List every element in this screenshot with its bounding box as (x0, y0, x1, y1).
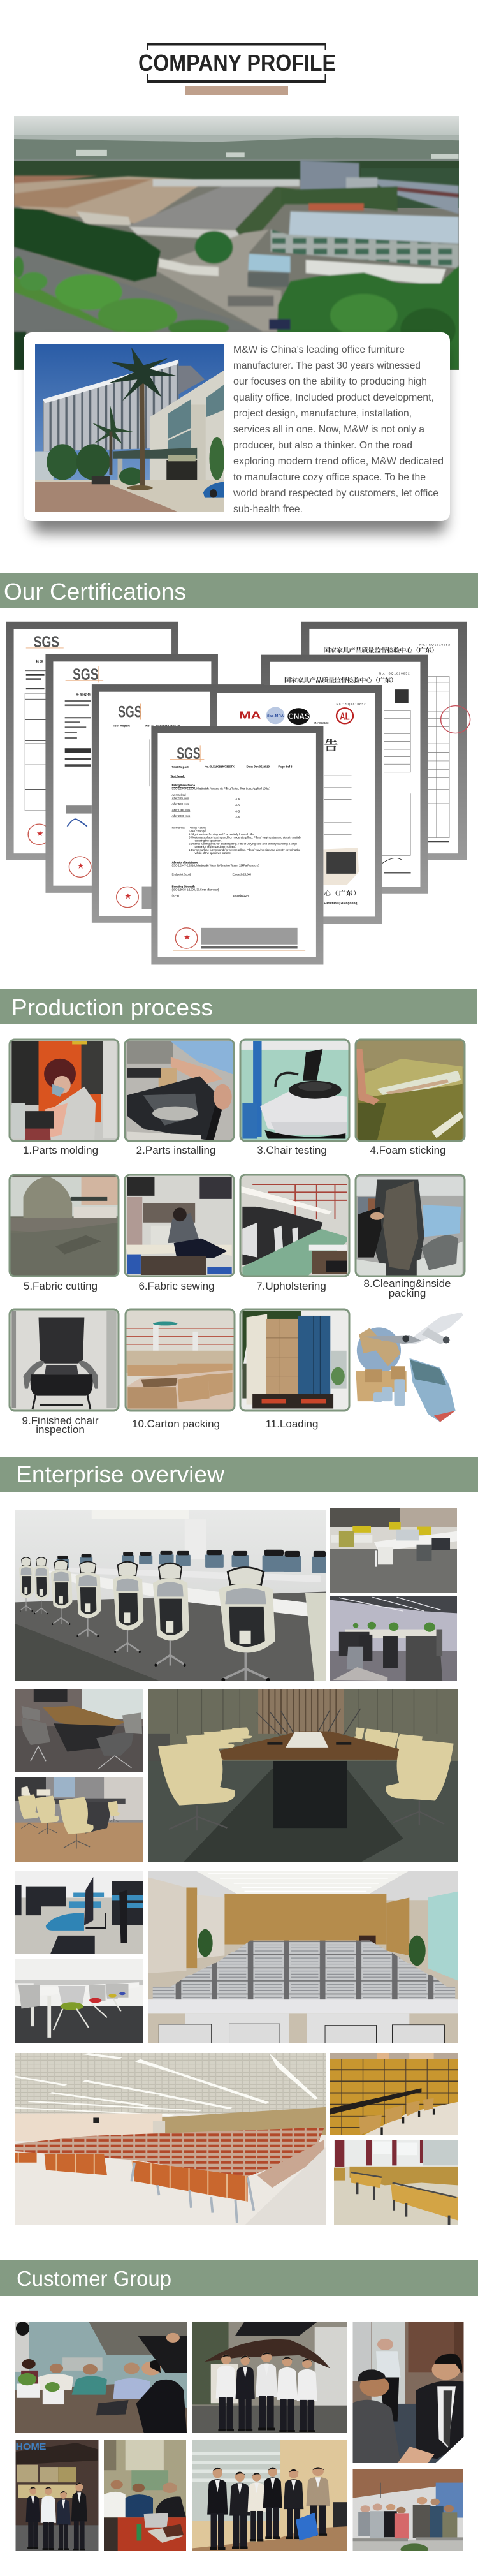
card background (24, 332, 450, 521)
certificate: SGS front centre: 5 No change (189, 830, 206, 833)
photo: tiered seating with yellow wooden desks (330, 2053, 458, 2135)
certificate: national test report third right: No.: SQ1810852 (337, 703, 366, 706)
certificate: SGS third left: SGS (118, 702, 142, 721)
step 4: foam sticking (356, 1040, 465, 1156)
certificate: national test report second right (261, 655, 428, 894)
certificate: SGS front centre: Abrasion Resistance (172, 861, 198, 864)
heading band: Enterprise overview: Enterprise overview (16, 1461, 225, 1487)
certificate: national test report back right: 国家家具产品质量监督检验中心（广东） (323, 646, 438, 654)
intro paragraph: quality office, Included product development, (233, 392, 434, 403)
intro paragraph: manufacturer. The past 30 years witnessed (233, 360, 421, 371)
certificate: national test report third right: Furniture (Guangdong) (324, 901, 359, 904)
heading band: Our Certifications: Our Certifications (4, 578, 186, 605)
card shadow (32, 344, 446, 533)
heading band: Production process: Production process (11, 994, 213, 1020)
photo: modern office desks with plants (330, 1596, 457, 1681)
intro paragraph: M&W is China’s leading office furniture (233, 344, 405, 355)
certificate: SGS front centre: ★ (184, 934, 191, 941)
certificate: SGS front centre: Test Report (172, 765, 189, 769)
certificate: SGS front centre: 2 Distinct fuzzing and / or distinct pilling. Pills of varying size and density covering a large (189, 842, 298, 845)
certificate: SGS back left: SGS (34, 633, 59, 651)
certificate: SGS third left: No. SLX1908240736STX (145, 724, 180, 727)
step 4: foam sticking: 4.Foam sticking (370, 1144, 446, 1156)
photo: training chairs with blue seats (15, 1871, 143, 1954)
panel: company intro card (24, 332, 450, 521)
photo: conference room with long table and microphones (148, 1689, 458, 1862)
certificate: SGS front centre: covering the specimen. (195, 839, 222, 842)
intro paragraph: to manufacture cozy office space. To be the (233, 472, 426, 483)
heading band: Customer Group: Customer Group (17, 2267, 171, 2290)
certificate: national test report third right: ilac-MRA (267, 714, 284, 718)
step 5: fabric cutting: 5.Fabric cutting (24, 1280, 98, 1292)
certificate: SGS front centre: Bursting Strength (172, 885, 195, 888)
certificate: national test report third right: CNAS (288, 712, 310, 721)
title frame (147, 43, 326, 83)
step 6: fabric sewing: 6.Fabric sewing (138, 1280, 215, 1292)
certificate: SGS front centre: End point (rubs) (172, 873, 191, 876)
certificate: national test report third right: 告 (324, 739, 338, 753)
intro paragraph: our focuses on the ability to producing high (233, 376, 427, 387)
photo: tiered auditorium with orange seating (15, 2053, 326, 2225)
certificate: SGS front centre: No. SLX1908240736STX (205, 765, 235, 769)
step 11: loading: 11.Loading (266, 1418, 318, 1430)
certificate: SGS second left: 检 测 报 告 (76, 693, 91, 697)
certificate: SGS front centre: After 125 revs (172, 797, 189, 800)
icon: global shipping illustration with plane, globe, trucks and ship (356, 1313, 463, 1422)
step 6: fabric sewing (125, 1175, 234, 1292)
photo: open office workstations with yellow panels (330, 1508, 457, 1593)
certificate: SGS back left (6, 622, 178, 860)
certificate: national test report back right: No.: SQ1810852 (419, 644, 450, 647)
step 8: cleaning and inside packing: 8.Cleaning&inside (363, 1277, 451, 1290)
heading band: Production process (0, 989, 477, 1024)
heading band: Customer Group (0, 2260, 478, 2296)
step 7: upholstering: 7.Upholstering (256, 1280, 326, 1292)
certificate: SGS front centre: Remarks: (172, 827, 185, 830)
certificate: SGS front centre: Exceeds 25,000 (232, 873, 252, 876)
photo: seven visitors in a wood-ceiling showroom (353, 2469, 463, 2551)
photo: group standing before a whale skeleton (192, 2322, 347, 2433)
certificate: SGS front centre: Pilling Resistance (172, 784, 195, 787)
photo: four men in suits on a street: HOME (15, 2441, 46, 2452)
photo: two men in conversation at a trade show (353, 2322, 464, 2463)
certificate: SGS third left: Test Report (113, 724, 130, 727)
certificate: national test report second right: No.: SQ1810852 (379, 672, 410, 675)
certificate: SGS back left: 检 测 (36, 659, 43, 664)
photo: four men in suits on a street (15, 2440, 98, 2551)
certificate: SGS front centre: SGS (177, 744, 201, 763)
certificate: SGS front centre: As received (172, 793, 186, 797)
certificate: SGS front centre: After 2000 revs (172, 814, 191, 818)
certificate: national test report third right: CNAS L0193 (314, 721, 329, 725)
photo: six men in an office with a monitor (192, 2440, 347, 2551)
step 2: parts installing: 2.Parts installing (136, 1144, 215, 1156)
certificate: SGS front centre: (ISO 13938-1:1999, 30.5mm diameter) (172, 888, 219, 892)
certificate: SGS front centre: 4-5 (235, 810, 240, 813)
certificate: national test report third right: 心（广东） (324, 889, 360, 897)
certificate: SGS third left: ★ (125, 894, 131, 900)
photo: classroom with white desks and colourful chairs (15, 1959, 143, 2043)
certificate: SGS second left (45, 654, 218, 893)
photo: aerial view of the factory (14, 116, 459, 370)
step 9: finished chair inspection: inspection (36, 1424, 85, 1436)
certificate: SGS third left (92, 684, 264, 923)
certificate: SGS second left: ★ (77, 863, 84, 870)
certificate: SGS front centre: Test Result: (171, 775, 185, 777)
certificate: SGS front centre: whole of the specimen surface. (195, 851, 231, 855)
step 3: chair testing (240, 1040, 349, 1156)
certificate: national test report third right: AL (340, 710, 350, 722)
certificate: SGS second left: SGS (73, 665, 98, 684)
certificate: SGS front centre (151, 726, 323, 965)
step 1: parts molding (10, 1040, 119, 1156)
intro paragraph: producer, but also a thinker. On the road (233, 440, 412, 451)
step 8: cleaning and inside packing: packing (389, 1287, 426, 1299)
photo: meeting room with cream chairs on wood floor (15, 1777, 143, 1862)
photo: headquarters building with palm trees (35, 344, 224, 512)
intro paragraph: services all in one. Now, M&W is not only a (233, 424, 424, 435)
step 9: finished chair inspection: 9.Finished chair (22, 1415, 99, 1427)
certificate: SGS front centre: Pilling Rating (189, 827, 206, 830)
step 2: parts installing (125, 1040, 234, 1156)
step 1: parts molding: 1.Parts molding (23, 1144, 98, 1156)
certificate: SGS front centre: 3 Moderate surface fuzzing and / or moderate pilling. Pills of varying size and density partially (189, 836, 302, 839)
photo: customers at a meeting table with a laptop (15, 2322, 187, 2433)
heading band: Our Certifications (0, 573, 478, 608)
certificate: SGS front centre: Page 3 of 3 (278, 765, 293, 769)
certificate: national test report third right: MA (239, 709, 261, 721)
intro paragraph: sub-health free. (233, 504, 303, 515)
step 8: cleaning and inside packing (356, 1175, 465, 1299)
certificate: SGS front centre: Exceeded1,276 (233, 894, 250, 897)
certificate: SGS front centre: After 1000 revs (172, 809, 191, 812)
heading band: Enterprise overview (0, 1457, 478, 1492)
step 10: carton packing: 10.Carton packing (132, 1418, 220, 1430)
title accent bar (185, 86, 288, 95)
certificate: national test report third right (210, 685, 382, 924)
certificate: SGS front centre: proportion of the specimen surface. (195, 845, 236, 848)
intro paragraph (233, 344, 444, 515)
certificate: SGS front centre: 4-5 (235, 797, 240, 800)
step 7: upholstering (240, 1175, 349, 1292)
panel: certificates (6, 622, 470, 965)
step 3: chair testing: 3.Chair testing (257, 1144, 327, 1156)
title text: COMPANY PROFILE (138, 50, 336, 76)
photo: training room with white mesh task chairs (15, 1510, 326, 1681)
step 10: carton packing (126, 1309, 235, 1430)
step 11: loading (240, 1309, 349, 1430)
step 9: finished chair inspection (10, 1309, 119, 1436)
step 5: fabric cutting (10, 1175, 119, 1292)
certificate: SGS back left: ★ (37, 830, 43, 837)
title: COMPANY PROFILE (138, 43, 336, 95)
intro paragraph: project design, manufacture, installation, (233, 408, 412, 419)
certificate: national test report second right: 国家家具产品质量监督检验中心（广东） (284, 676, 397, 684)
certificate: SGS front centre: 4-5 (235, 804, 240, 806)
certificate: SGS front centre: 4 Slight surface fuzzing and / or partially formed pills. (189, 833, 254, 836)
certificate: SGS front centre: After 500 revs (172, 802, 189, 806)
certificate: SGS front centre: (ISO 12945-2:2000, Martindale Abrasion & Pilling Tester, Total Load Applied 155g.) (172, 787, 270, 790)
certificate: SGS front centre: (ISO 12947-2:2016, Martindale Wear & Abrasion Tester, 12kPa Pressure) (172, 864, 259, 867)
certificate: national test report back right (301, 622, 470, 860)
certificate: SGS front centre: Date: Jun 05, 2019 (247, 765, 270, 769)
certificate: SGS front centre: (kPa) (172, 894, 179, 897)
intro paragraph: world brand respected by customers, let office (233, 488, 438, 499)
photo: classroom with fixed desks and maroon curtains (334, 2140, 458, 2225)
photo: three men seated at a red table (104, 2440, 186, 2551)
photo: boardroom with wooden table and grey chairs (15, 1689, 143, 1772)
photo: lecture hall with grey perforated chairs (148, 1871, 458, 2043)
certificate: SGS front centre: 1 Dense surface fuzzing and / or severe pilling. Pills of varying size and density covering the (189, 848, 301, 851)
intro paragraph: exploring modern trend office, M&W dedicated (233, 456, 444, 467)
certificate: SGS front centre: 4-5 (235, 816, 240, 819)
